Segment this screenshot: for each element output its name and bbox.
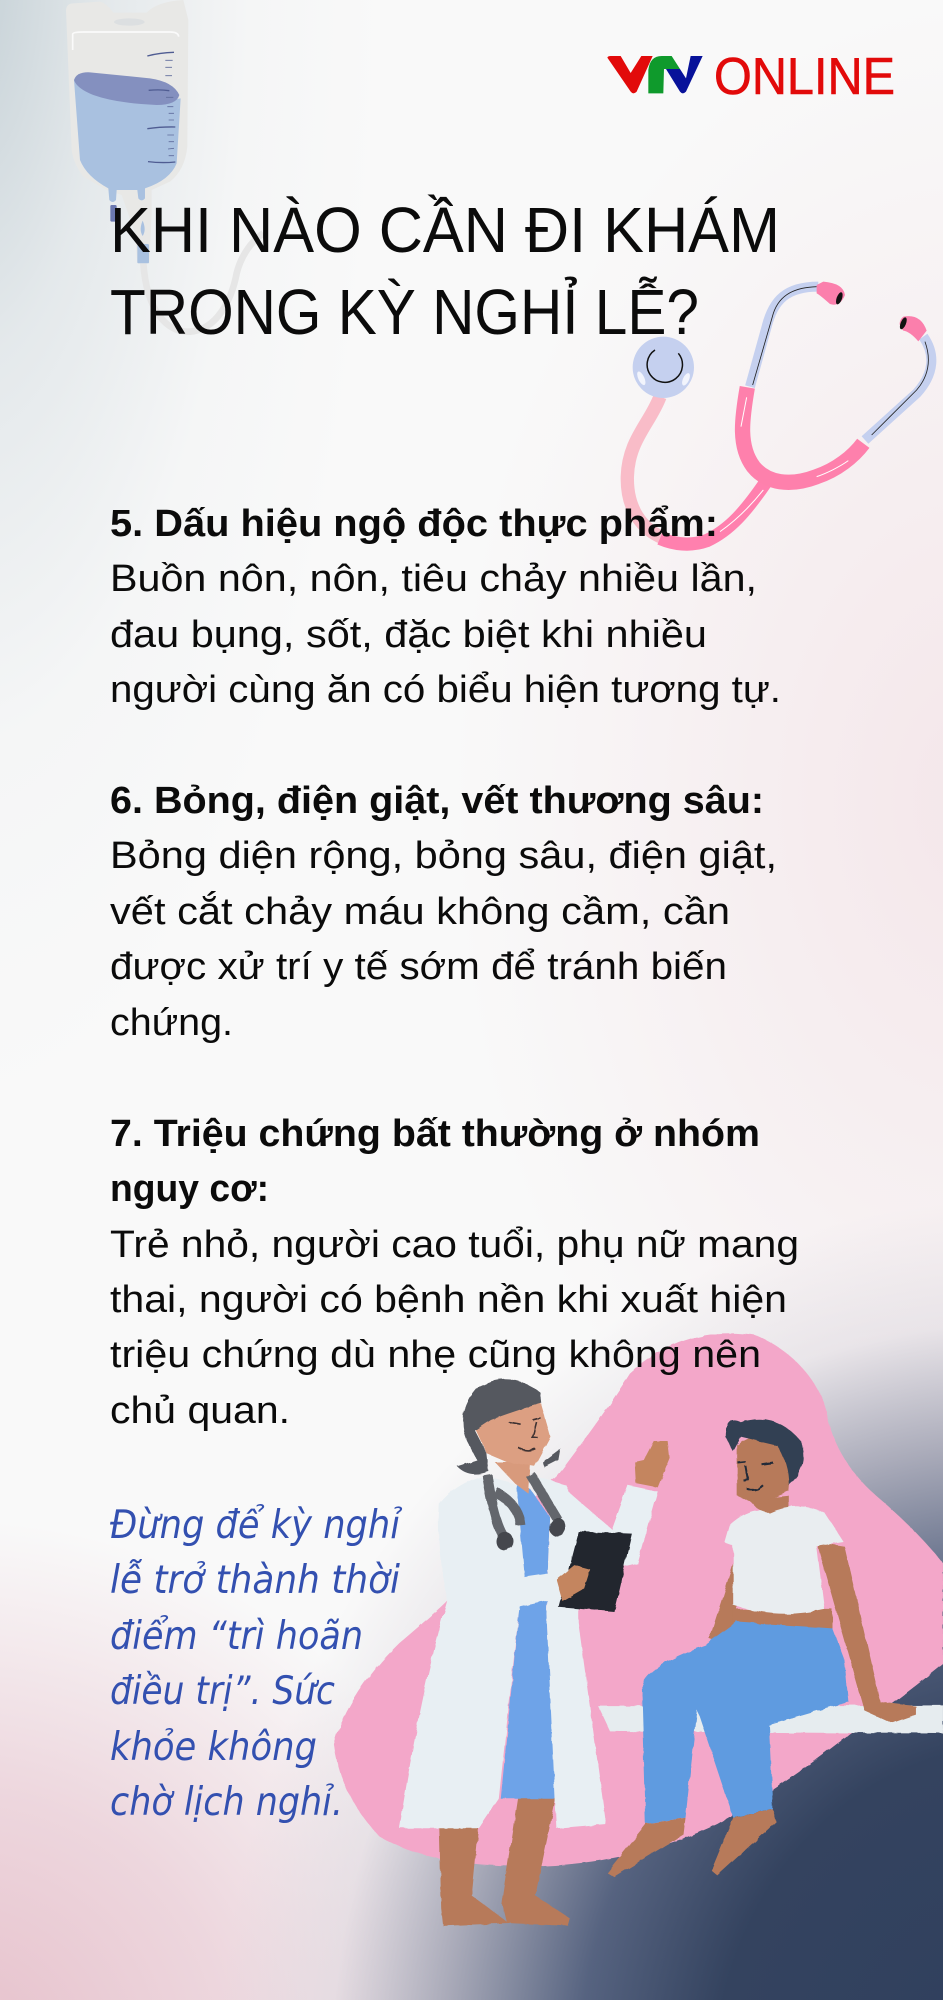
closing message: chờ lịch nghỉ. (110, 1780, 343, 1825)
pink blob (334, 1333, 943, 1867)
doctor (399, 1379, 670, 1926)
patient (607, 1419, 916, 1877)
VTV mark (607, 56, 703, 93)
text block: section 7: thai, người có bệnh nền khi xuất hiện (110, 1279, 787, 1321)
closing message (110, 1503, 403, 1825)
text block: section 6: được xử trí y tế sớm để tránh biến (110, 946, 727, 988)
text block: section 6: vết cắt chảy máu không cầm, cần (110, 890, 730, 933)
closing message: điểm “trì hoãn (110, 1614, 363, 1659)
text block: section 7: Trẻ nhỏ, người cao tuổi, phụ nữ mang (110, 1224, 799, 1266)
text block: section 7: chủ quan. (110, 1390, 290, 1432)
logo: VTV Online (607, 48, 895, 106)
text block: section 7: nguy cơ: (110, 1168, 269, 1210)
text block: section 6: Bỏng diện rộng, bỏng sâu, điện giật, (110, 835, 777, 877)
text block: section 5: 5. Dấu hiệu ngộ độc thực phẩm: (110, 503, 718, 545)
closing message: lễ trở thành thời (110, 1558, 400, 1603)
title (110, 194, 780, 348)
icon: IV drip bag (66, 0, 263, 332)
text block: section 5: Buồn nôn, nôn, tiêu chảy nhiều lần, (110, 558, 757, 600)
text block: section 6 (110, 780, 777, 1044)
title: TRONG KỲ NGHỈ LỄ? (110, 275, 699, 348)
text block: section 5: đau bụng, sốt, đặc biệt khi nhiều (110, 614, 707, 656)
text block: section 7: 7. Triệu chứng bất thường ở nhóm (110, 1113, 760, 1155)
title: KHI NÀO CẦN ĐI KHÁM (110, 194, 780, 266)
icon: stethoscope (627, 282, 931, 544)
text block: section 6: 6. Bỏng, điện giật, vết thương sâu: (110, 780, 764, 822)
illustration: doctor and patient (334, 1333, 943, 1926)
closing message: điều trị”. Sức (110, 1669, 335, 1714)
bench (598, 1705, 943, 1734)
wordmark: ONLINE (714, 48, 895, 106)
text block: section 7 (110, 1113, 799, 1432)
text block: section 5: người cùng ăn có biểu hiện tương tự. (110, 669, 781, 711)
closing message: Đừng để kỳ nghỉ (110, 1503, 403, 1548)
text block: section 7: triệu chứng dù nhẹ cũng không nên (110, 1334, 761, 1376)
text block: section 6: chứng. (110, 1002, 233, 1044)
closing message: khỏe không (110, 1725, 317, 1770)
text block: section 5 (110, 503, 781, 711)
